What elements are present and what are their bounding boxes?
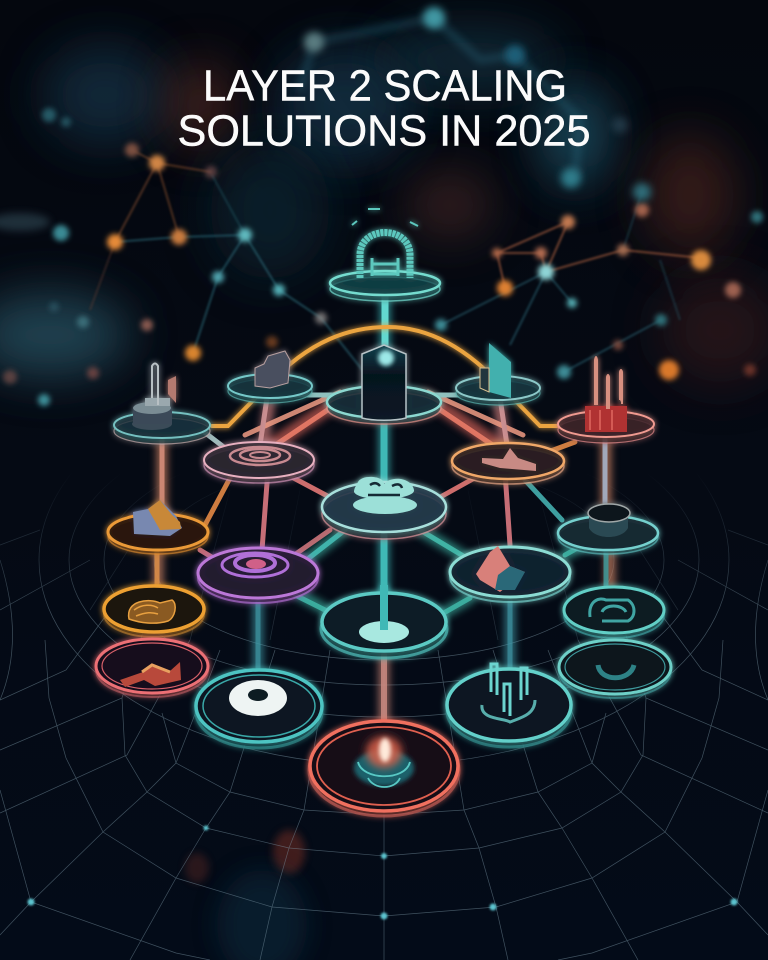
disc: bottom red glow [309, 721, 459, 816]
disc: red left [96, 639, 208, 697]
disc: teal lower right [564, 587, 664, 638]
icon: energy core [354, 736, 414, 787]
icon: links [120, 662, 181, 687]
icon: concentric rings [230, 447, 290, 465]
icon: swirl [353, 477, 417, 514]
title: SOLUTIONS IN 2025 [178, 106, 590, 156]
icon: towers [489, 343, 511, 398]
connector beams [157, 290, 610, 730]
disc: row two right [456, 343, 540, 405]
icon: ribbed block [133, 500, 182, 536]
icon: bar chart glyph [482, 664, 535, 722]
icon: arch [352, 209, 418, 278]
disc: amber left [108, 500, 208, 554]
disc: teal right lower [559, 640, 671, 698]
icon: washer [229, 680, 287, 716]
icon: peak [482, 448, 536, 471]
icon: monolith [362, 345, 406, 420]
grid nodes [28, 826, 738, 920]
icon: torus [222, 553, 288, 577]
title: LAYER 2 SCALING [203, 62, 567, 110]
disc: teal center lower [321, 585, 447, 658]
disc: centre [322, 477, 446, 539]
disc: row two center [327, 345, 441, 424]
title [178, 62, 590, 156]
icon: round box [589, 512, 628, 537]
disc: orange lower left [104, 586, 204, 637]
disc: teal ring with chart [447, 664, 571, 747]
icon: seed [129, 600, 175, 623]
disc: far right with red machine icon [558, 357, 654, 443]
disc: teal right upper [558, 504, 658, 554]
disc: teal right middle [450, 546, 570, 602]
disc: far left with machine icon [114, 364, 210, 444]
background network: right constellation [441, 192, 701, 372]
icon: crystals [476, 546, 525, 592]
icon: machine [132, 364, 176, 430]
disc: ridged left [204, 442, 314, 483]
icon: red factory [585, 357, 627, 432]
disc: teal ring with white washer [196, 670, 322, 748]
icon: crescent [598, 665, 634, 678]
background network: left constellation [3, 7, 763, 406]
disc: purple [198, 548, 318, 603]
icon: loop [590, 599, 634, 621]
glow beams [158, 290, 610, 730]
icon: blocks [255, 351, 290, 388]
perspective grid floor [0, 488, 768, 960]
icon: plate [359, 621, 409, 643]
disc: amber right [452, 443, 564, 484]
disc: top with arch icon [330, 209, 440, 301]
disc: row two left [228, 351, 312, 403]
beams [382, 292, 388, 392]
orange arc [212, 327, 565, 426]
